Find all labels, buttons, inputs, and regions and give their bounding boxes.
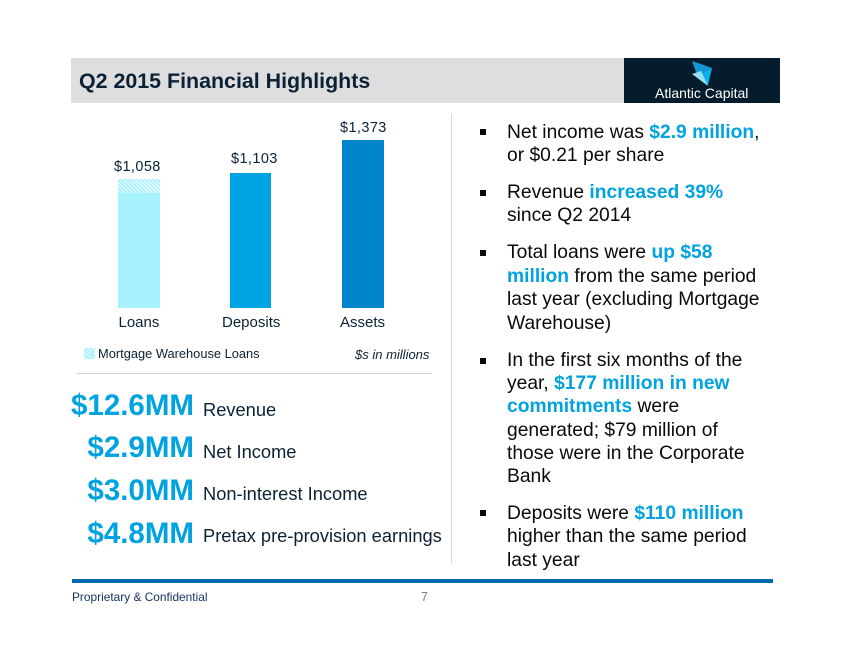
value: Deposits: $1,103: [231, 151, 278, 167]
bullet text: last year: [507, 550, 580, 571]
bullet marker: [480, 358, 486, 364]
metric: Revenue: Revenue: [203, 399, 276, 420]
icon: logo mark: [692, 61, 712, 86]
bullet text: since Q2 2014: [507, 205, 631, 226]
bullet marker: [480, 190, 486, 196]
bullet text: Deposits were $110 million: [507, 503, 743, 524]
metric: Revenue: $12.6MM: [71, 389, 194, 422]
legend label: Mortgage Warehouse Loans: [98, 346, 260, 361]
metric: Pretax pre-provision earnings: $4.8MM: [87, 517, 194, 550]
bullet text: last year (excluding Mortgage: [507, 289, 760, 310]
bullet text: million from the same period: [507, 266, 756, 286]
bullet text: or $0.21 per share: [507, 145, 664, 166]
metric: Pretax pre-provision earnings: [87, 517, 442, 550]
bullet: deposits: [480, 503, 747, 571]
axis label: Loans: Loans: [118, 314, 159, 331]
metric: Pretax pre-provision earnings: Pretax pre-provision earnings: [203, 525, 442, 546]
bar chart: [114, 120, 387, 331]
title bar: [71, 58, 624, 103]
bar: Assets: [342, 140, 384, 308]
bullet text: [507, 182, 723, 226]
bullet text: year, $177 million in new: [507, 373, 730, 394]
bullet text: higher than the same period: [507, 526, 747, 547]
footer text: Proprietary & Confidential: [72, 590, 208, 604]
bullet marker: [480, 250, 486, 256]
bullet: commitments: [480, 350, 745, 487]
page number: 7: [421, 590, 428, 604]
bullet: loans: [480, 242, 760, 334]
hatched segment: Mortgage Warehouse: [118, 179, 160, 193]
bullet text: [507, 503, 747, 571]
metric: Non-interest Income: Non-interest Income: [203, 483, 368, 504]
bullet marker: [480, 510, 486, 516]
bullet text: Net income was $2.9 million,: [507, 122, 760, 143]
bullet text: [507, 242, 760, 334]
bullet marker: [480, 129, 486, 135]
bullet text: generated; $79 million of: [507, 420, 718, 441]
metrics: left column: [71, 389, 442, 550]
bullet text: Warehouse): [507, 312, 611, 334]
bar: Deposits: [230, 173, 271, 308]
bullet: revenue: [480, 182, 723, 226]
metric: Net Income: Net Income: [203, 441, 296, 462]
axis label: Deposits: Deposits: [222, 314, 280, 331]
metric: Net Income: [87, 431, 296, 464]
metric: Non-interest Income: [87, 474, 368, 507]
value: Assets: $1,373: [340, 120, 387, 136]
bullet text: Bank: [507, 466, 551, 487]
title: Q2 2015 Financial Highlights: [79, 69, 370, 93]
logo: Atlantic Capital: [624, 58, 780, 103]
metric: Net Income: $2.9MM: [87, 431, 194, 464]
units note: $s in millions: [355, 347, 429, 362]
legend swatch: [84, 348, 95, 359]
axis label: Assets: Assets: [340, 314, 385, 331]
bullet text: Revenue increased 39%: [507, 182, 723, 203]
metric: Non-interest Income: $3.0MM: [87, 474, 194, 507]
bullet text: [507, 350, 745, 487]
bullet text: those were in the Corporate: [507, 443, 745, 464]
value: Loans: $1,058: [114, 159, 161, 175]
metric: Revenue: [71, 389, 276, 422]
legend: Mortgage Warehouse Loans: [84, 346, 260, 361]
bullet: net income: [480, 122, 760, 166]
bar: Loans: [118, 179, 160, 308]
bullet text: In the first six months of the: [507, 350, 742, 371]
bullet text: Total loans were up $58: [507, 242, 712, 263]
bullet text: commitments were: [507, 396, 679, 417]
logo text: Atlantic Capital: [655, 85, 748, 101]
bullet text: [507, 122, 760, 166]
